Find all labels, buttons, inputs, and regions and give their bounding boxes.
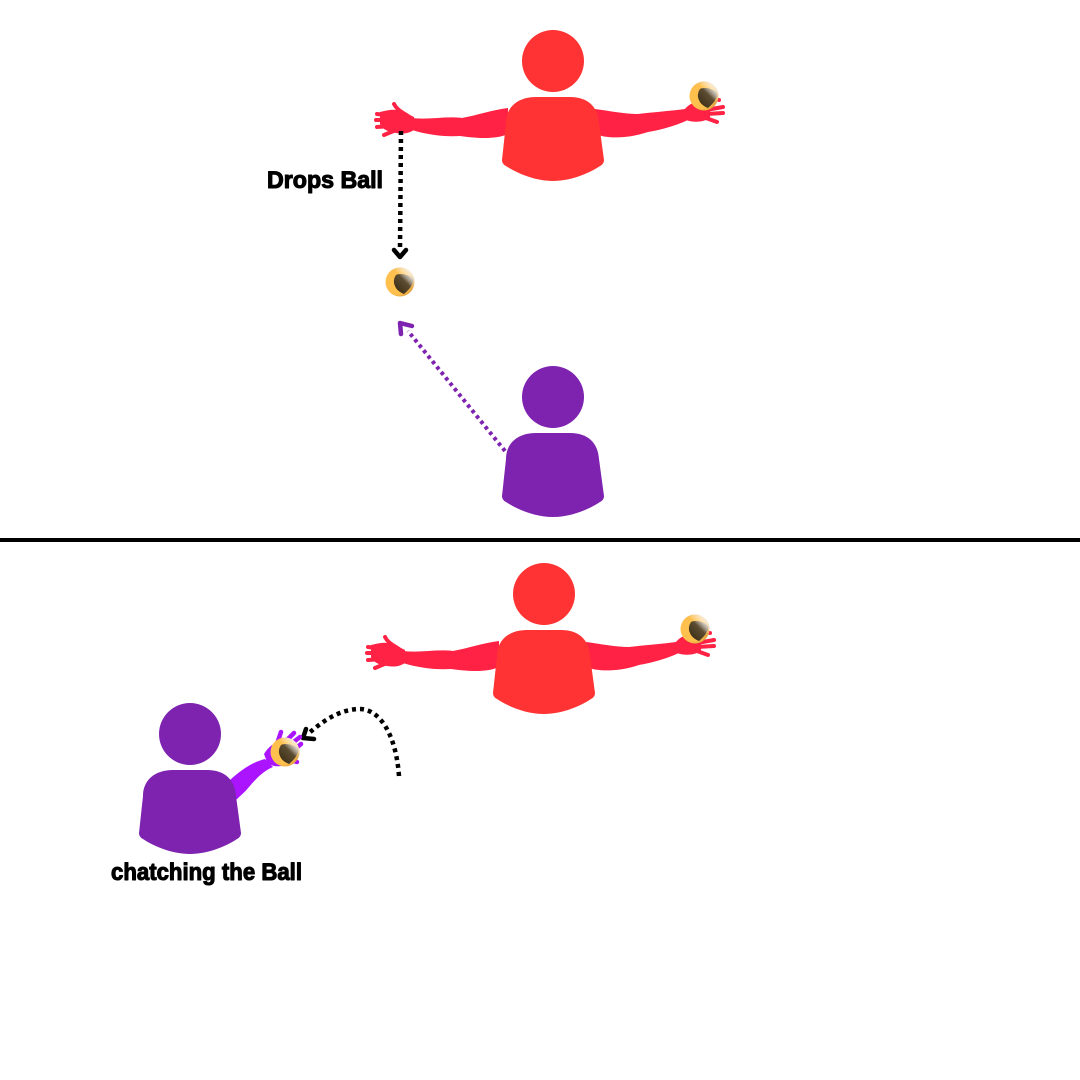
ball held in right hand	[680, 614, 710, 644]
figure: red person with arms, top panel	[376, 30, 723, 181]
arrow: thrown ball arc, black dotted	[303, 709, 399, 776]
label: Drops Ball: Drops Ball	[267, 167, 383, 194]
head: purple	[522, 366, 584, 428]
body: purple	[502, 433, 604, 517]
head: purple	[159, 703, 221, 765]
head: red	[513, 563, 575, 625]
left arm: red	[367, 637, 499, 671]
left arm: red	[376, 104, 508, 138]
head: red	[522, 30, 584, 92]
right arm: red	[586, 631, 714, 670]
body: red	[493, 630, 595, 714]
figure: purple person catching ball, bottom panel	[139, 703, 301, 854]
falling ball	[386, 268, 414, 296]
ball held in right hand	[690, 82, 718, 110]
body: purple	[139, 770, 241, 854]
figure: purple person, top panel	[502, 366, 604, 517]
figure: red person with arms, bottom panel	[367, 563, 714, 714]
body: red	[502, 97, 604, 181]
arm: purple reaching with hand	[230, 732, 301, 800]
arrow: ball drop path, black dotted	[394, 131, 406, 257]
caught ball	[270, 738, 300, 766]
right arm: red	[595, 98, 723, 137]
label: catching the ball: chatching the Ball	[111, 859, 302, 886]
divider line	[0, 538, 1080, 542]
arrow: purple player runs toward ball	[400, 323, 505, 451]
